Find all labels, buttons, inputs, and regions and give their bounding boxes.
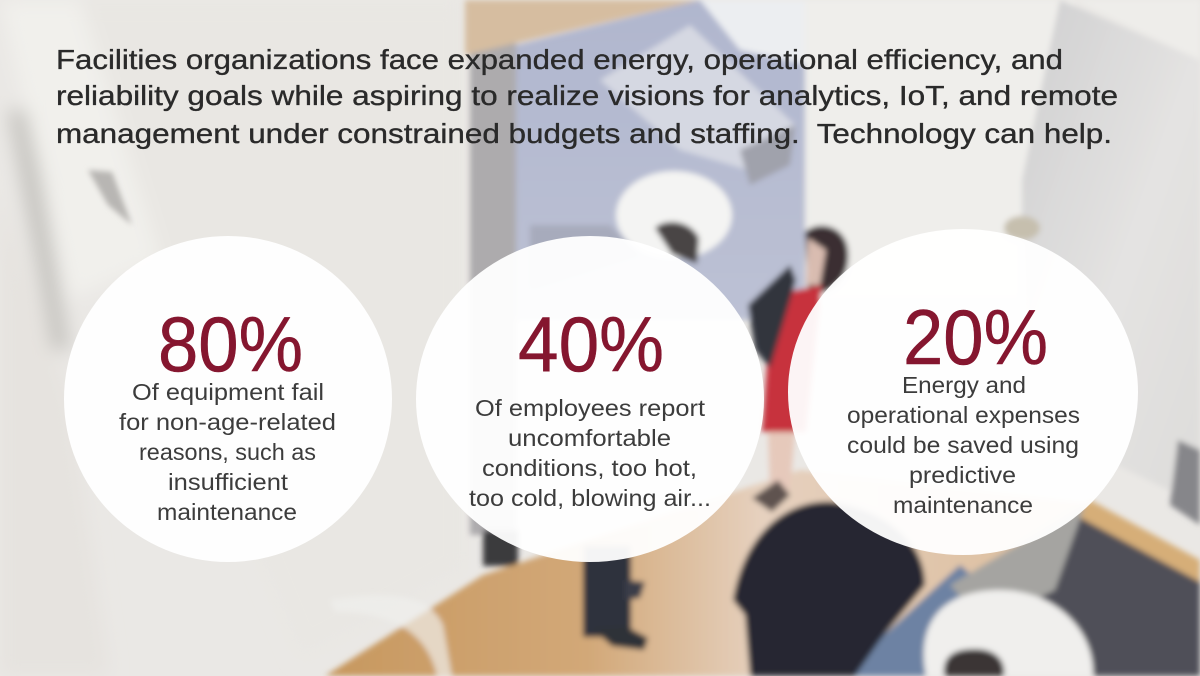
- caption: predictive maintenance savings: maintenance: [893, 492, 1033, 518]
- stat circle: 40%: [416, 236, 764, 562]
- caption: employee comfort: conditions, too hot,: [482, 455, 697, 481]
- headline text: management under constrained budgets and staffing. Technology can help.: [56, 118, 1112, 149]
- caption: predictive maintenance savings: [847, 372, 1080, 518]
- headline text: Facilities organizations face expanded energy, operational efficiency, and: [56, 44, 1063, 75]
- caption: predictive maintenance savings: operational expenses: [847, 402, 1080, 428]
- caption: predictive maintenance savings: Energy and: [902, 372, 1026, 398]
- headline text: [56, 44, 1118, 149]
- caption: predictive maintenance savings: predictive: [909, 462, 1016, 488]
- caption: equipment failure: reasons, such as: [139, 439, 316, 465]
- stat circle: 80%: [64, 236, 392, 562]
- caption: equipment failure: maintenance: [157, 499, 297, 525]
- caption: equipment failure: for non-age-related: [119, 409, 336, 435]
- caption: employee comfort: Of employees report: [475, 395, 706, 421]
- caption: employee comfort: uncomfortable: [508, 425, 671, 451]
- caption: equipment failure: insufficient: [168, 469, 289, 495]
- statistic: 40%: 40%: [518, 300, 664, 388]
- statistic: 20%: 20%: [903, 293, 1048, 381]
- caption: predictive maintenance savings: could be saved using: [847, 432, 1079, 458]
- caption: employee comfort: [469, 395, 711, 511]
- headline text: reliability goals while aspiring to realize visions for analytics, IoT, and remote: [56, 80, 1118, 111]
- stat circle: 20%: [788, 229, 1138, 555]
- caption: equipment failure: [119, 379, 336, 525]
- caption: employee comfort: too cold, blowing air...: [469, 485, 711, 511]
- statistic: 80%: 80%: [158, 300, 303, 388]
- caption: equipment failure: Of equipment fail: [132, 379, 324, 405]
